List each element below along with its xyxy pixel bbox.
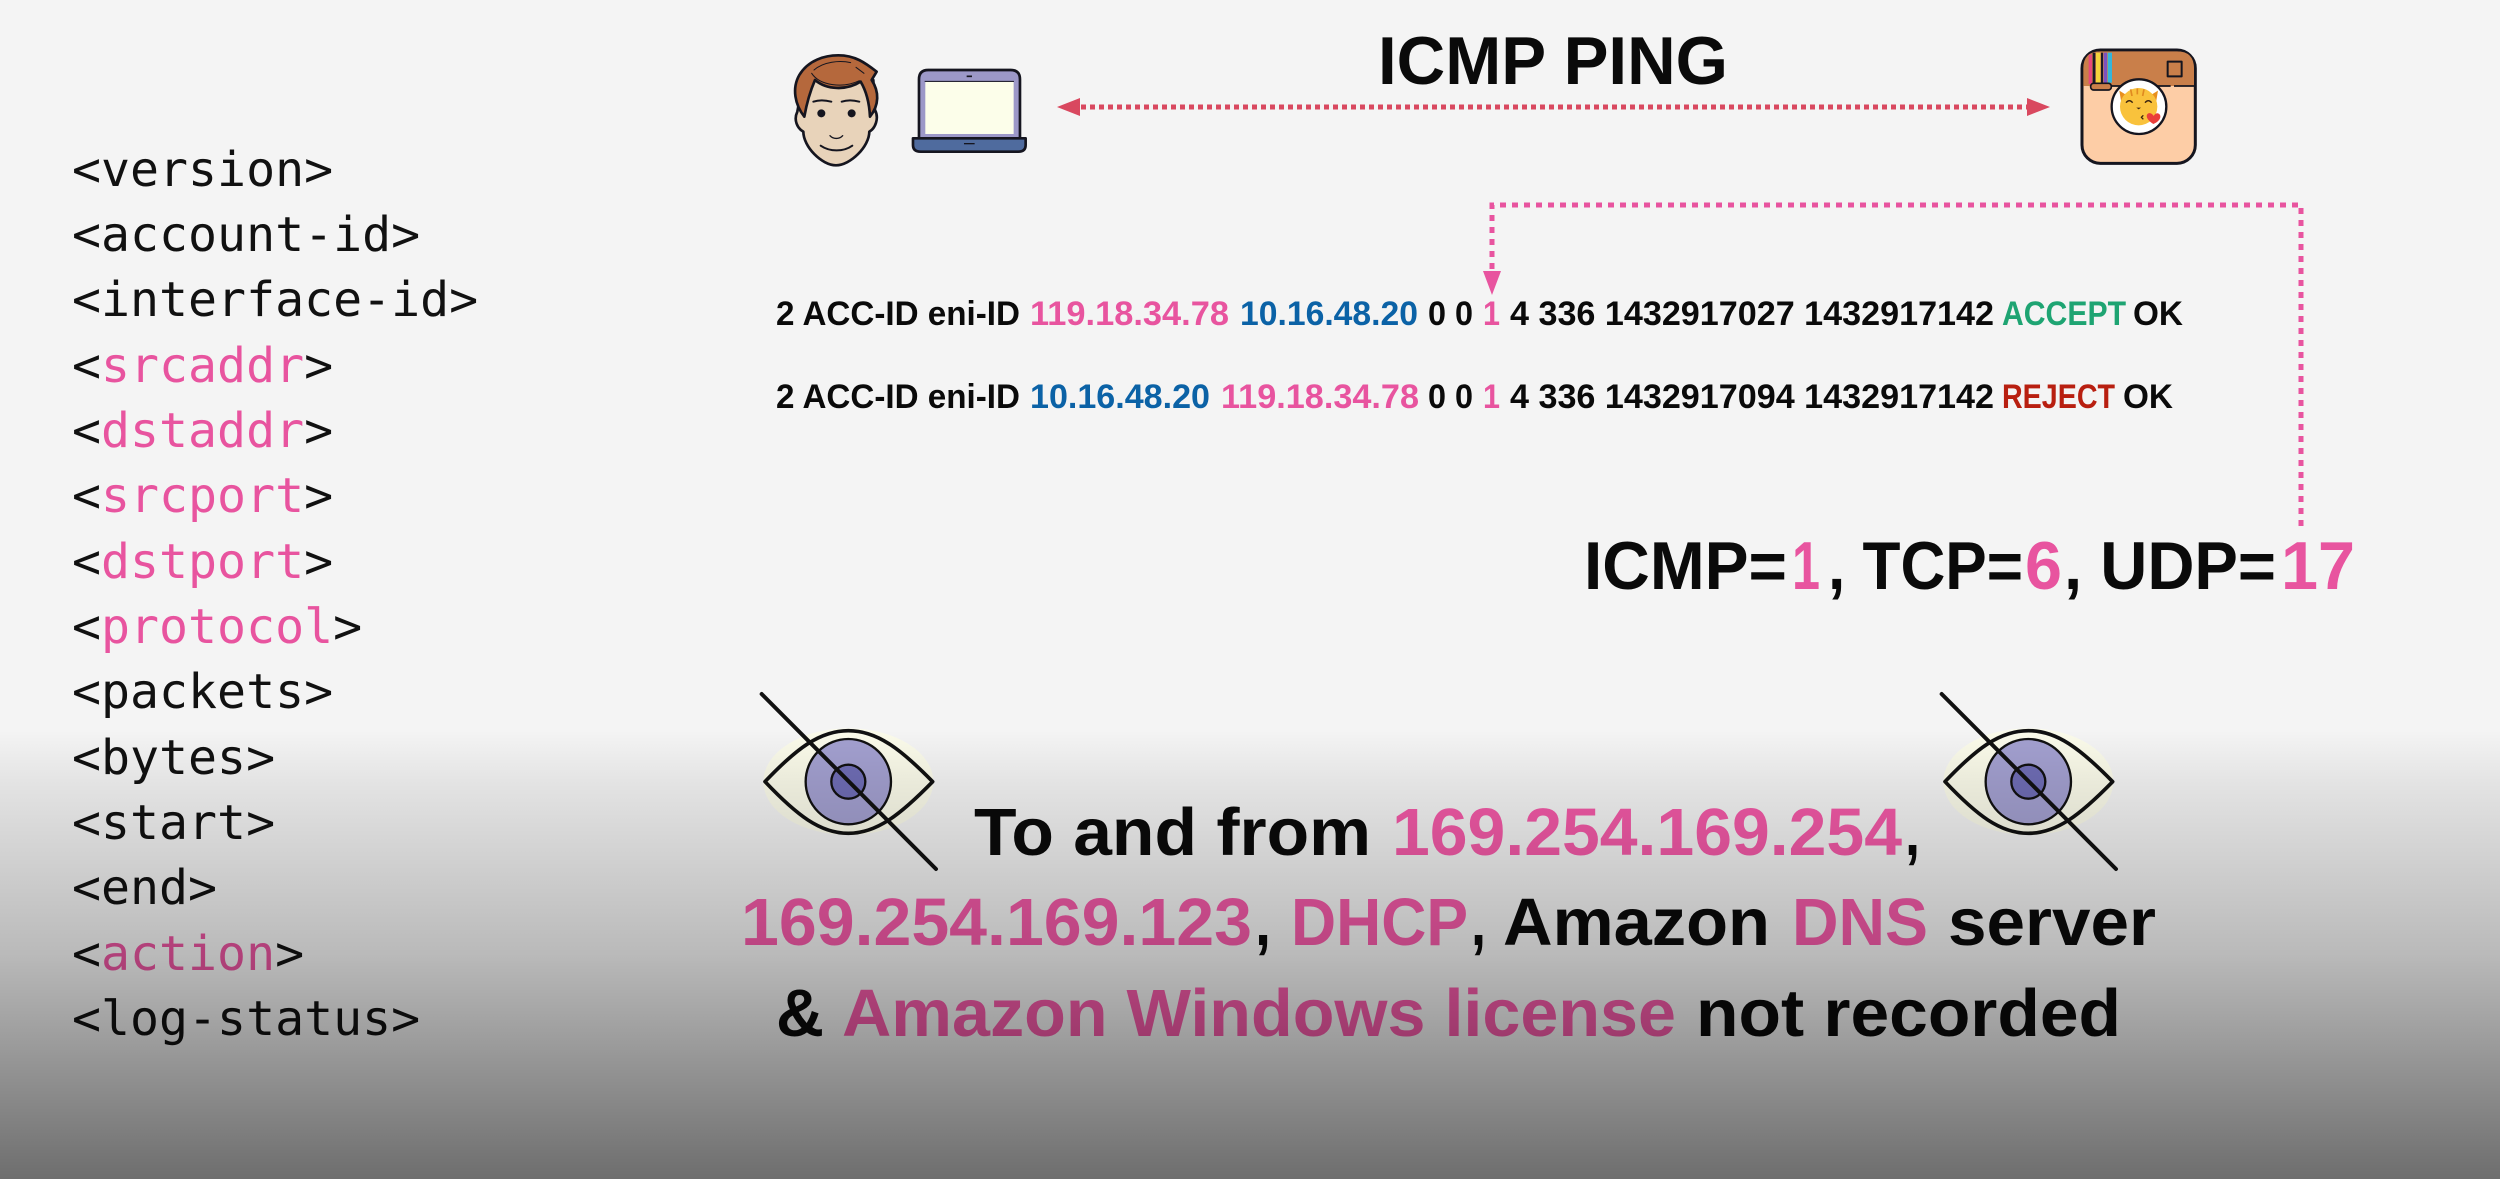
flow log field list: <log-status> [72, 991, 420, 1047]
log line: accepted: 1 [1483, 295, 1500, 333]
log line: accepted: 0 0 [1428, 295, 1473, 333]
rainbow stripes [2089, 53, 2112, 84]
flow log field list [72, 142, 478, 1047]
log line: rejected: 2 ACC-ID eni-ID [776, 378, 1020, 416]
exclusions statement [741, 795, 2156, 1051]
log line: accepted: OK [2133, 295, 2183, 333]
exclusions statement: DNS [1792, 885, 1928, 960]
protocol numbers: ICMP= [1584, 528, 1787, 604]
flow log field list: <dstport> [72, 534, 333, 590]
protocol numbers: 17 [2281, 528, 2355, 604]
log line: rejected: 0 0 [1428, 378, 1473, 416]
flow log field list: <account-id> [72, 207, 420, 263]
title: ICMP PING [1378, 23, 1728, 99]
exclusions statement: & [776, 976, 824, 1051]
log line: accepted: 10.16.48.20 [1240, 295, 1418, 333]
flow log field list: <start> [72, 795, 275, 851]
exclusions statement: server [1948, 885, 2156, 960]
log line: rejected: REJECT [2002, 378, 2115, 416]
icon: person face [795, 55, 877, 165]
exclusions statement: Amazon [1503, 885, 1770, 960]
flow log field list: <end> [72, 860, 217, 916]
icon: camera app [2082, 50, 2195, 163]
flow log field list: <action> [72, 926, 304, 982]
cat emoji face [2119, 88, 2160, 125]
arrow: ping both ways [1057, 98, 2050, 116]
icon: crossed eye left [762, 694, 936, 869]
bottom shading overlay [0, 730, 2500, 1179]
log line: accepted: 119.18.34.78 [1030, 295, 1229, 333]
exclusions statement: , [1255, 885, 1271, 960]
exclusions statement: DHCP [1291, 885, 1468, 960]
flow log field list: <bytes> [72, 730, 275, 786]
exclusions statement: , [1905, 795, 1920, 870]
log line: rejected: 10.16.48.20 [1030, 378, 1210, 416]
log line: rejected: OK [2123, 378, 2173, 416]
protocol numbers: 1 [1792, 528, 1820, 604]
icon: laptop [913, 70, 1026, 152]
exclusions statement: 169.254.169.123 [741, 885, 1252, 960]
log line: rejected: 119.18.34.78 [1221, 378, 1419, 416]
protocol numbers: , UDP= [2064, 528, 2276, 604]
flow log field list: <protocol> [72, 599, 362, 655]
log line: accepted: ACCEPT [2002, 295, 2126, 333]
log line: accepted: 2 ACC-ID eni-ID [776, 295, 1020, 333]
flow log field list: <dstaddr> [72, 403, 333, 459]
protocol numbers: 6 [2025, 528, 2062, 604]
log line: accepted [776, 295, 2183, 333]
log line: accepted: 4 336 1432917027 1432917142 [1510, 295, 1994, 333]
log line: rejected: 4 336 1432917094 1432917142 [1510, 378, 1994, 416]
flow log field list: <packets> [72, 664, 333, 720]
exclusions statement: , [1471, 885, 1486, 960]
flow log field list: <srcaddr> [72, 338, 333, 394]
flow log field list: <srcport> [72, 468, 333, 524]
arrow: protocol number pointer [1483, 205, 2301, 526]
protocol numbers [1584, 528, 2355, 604]
icon: crossed eye right [1942, 694, 2116, 869]
protocol numbers: , TCP= [1828, 528, 2023, 604]
exclusions statement: not recorded [1696, 976, 2121, 1051]
exclusions statement: 169.254.169.254 [1392, 795, 1902, 870]
exclusions statement: To and from [974, 795, 1371, 870]
log line: rejected [776, 378, 2173, 416]
exclusions statement: Amazon Windows license [842, 976, 1676, 1051]
flow log field list: <interface-id> [72, 272, 478, 328]
log line: rejected: 1 [1483, 378, 1500, 416]
flow log field list: <version> [72, 142, 333, 198]
